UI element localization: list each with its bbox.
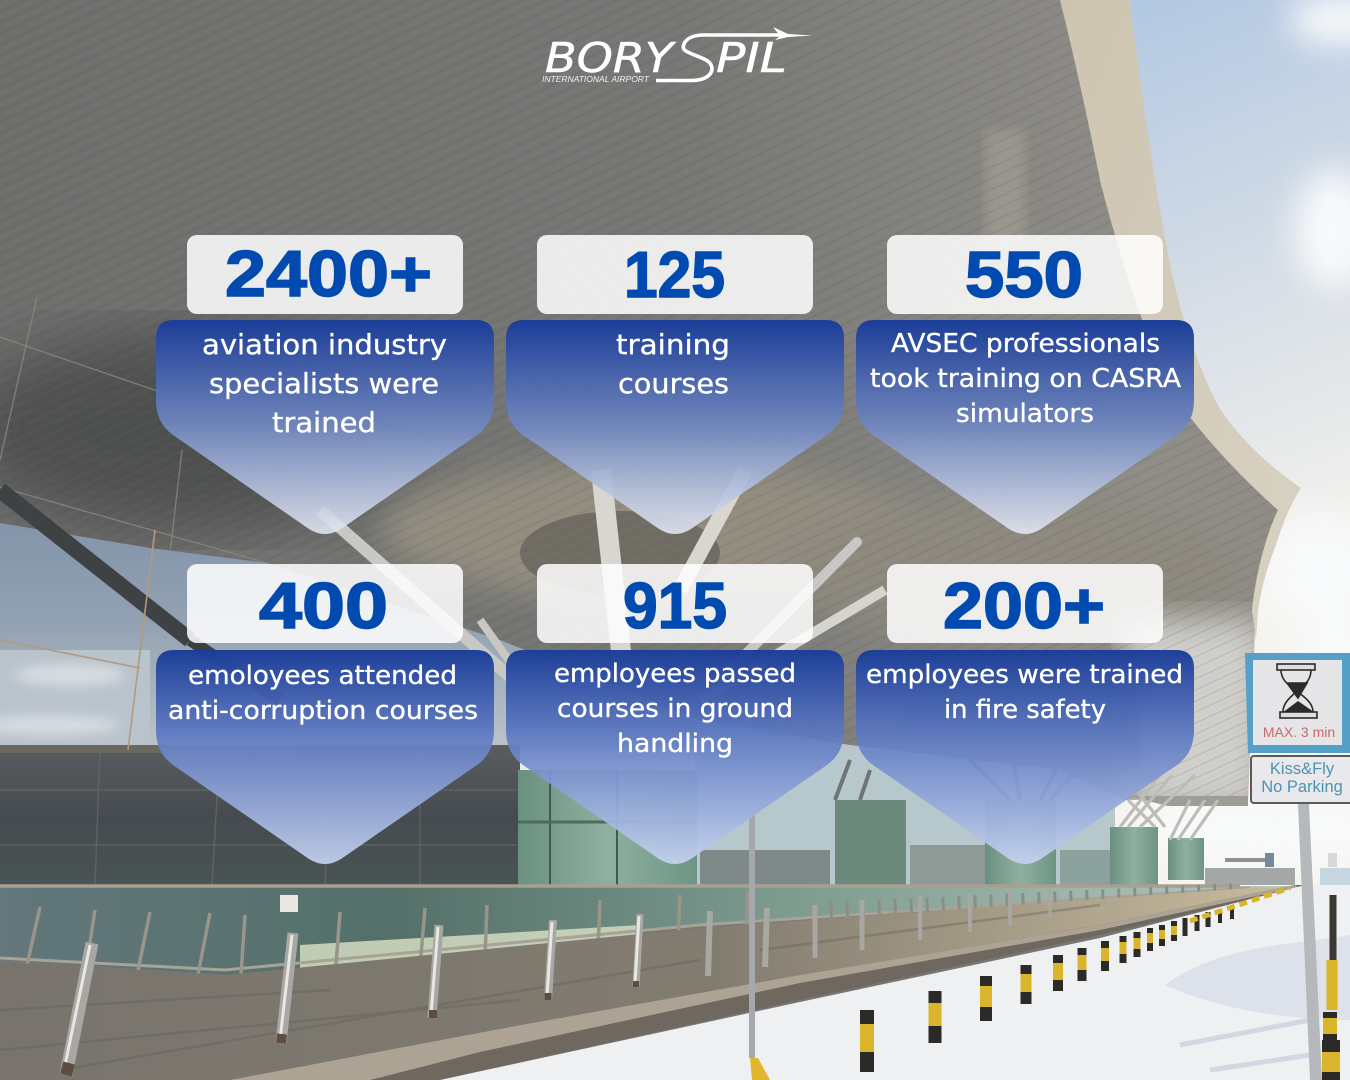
icon: hourglass	[1277, 664, 1317, 718]
sidewalk	[0, 888, 1295, 1080]
stat card: 400	[156, 564, 494, 864]
glass columns	[518, 770, 1204, 887]
description	[870, 329, 1181, 429]
distant buildings at horizon	[1205, 853, 1350, 885]
description: emoloyees attended	[188, 661, 457, 691]
description: employees passed	[554, 659, 796, 689]
stat card: 125	[506, 235, 844, 534]
description: courses in ground	[557, 694, 793, 724]
description: handling	[617, 729, 733, 759]
description	[616, 328, 730, 400]
number: 400	[259, 569, 388, 642]
logo wordmark BORY: BORY	[545, 34, 676, 82]
description	[554, 659, 796, 759]
sign: kiss and fly: Kiss&Fly	[1270, 760, 1335, 778]
roof soffit	[0, 0, 1350, 810]
description: took training on CASRA	[870, 364, 1181, 394]
number: 2400+	[225, 237, 432, 310]
pentagon panel	[156, 650, 494, 864]
logo wordmark PIL: PIL	[716, 34, 787, 82]
walkway sign pole	[750, 810, 770, 1080]
yellow and black road bollards	[867, 888, 1333, 1080]
sign: kiss and fly	[1251, 756, 1350, 803]
number box	[537, 564, 813, 643]
snow field	[440, 885, 1350, 1080]
logo subtitle: INTERNATIONAL AIRPORT	[542, 75, 650, 84]
number: 200+	[943, 569, 1105, 642]
description	[202, 328, 447, 439]
description: training	[616, 328, 730, 361]
reflected sky in terminal glass	[0, 500, 860, 750]
number: 125	[624, 238, 725, 311]
roof wing bottom edge	[1128, 796, 1248, 806]
number box	[537, 235, 813, 314]
description: courses	[618, 367, 729, 400]
stat card: 2400+	[156, 235, 494, 534]
number box	[187, 235, 463, 314]
number box	[887, 564, 1163, 643]
number box	[187, 564, 463, 643]
facade lines and struts	[0, 470, 1218, 840]
lower glass balustrade	[0, 886, 1300, 990]
description: employees were trained	[866, 660, 1183, 690]
pentagon panel	[506, 320, 844, 534]
number: 915	[623, 569, 727, 642]
curb and gutter	[230, 885, 1310, 1080]
description: trained	[272, 406, 376, 439]
description	[866, 660, 1183, 725]
number box	[887, 235, 1163, 314]
pentagon panel	[856, 650, 1194, 864]
stat card: 550	[856, 235, 1194, 534]
pentagon panel	[506, 650, 844, 864]
description: AVSEC professionals	[891, 329, 1160, 359]
description: specialists were	[209, 367, 439, 400]
pentagon panel	[156, 320, 494, 534]
parking sign: max 3 min	[1245, 653, 1350, 753]
description: aviation industry	[202, 328, 447, 361]
description: anti-corruption courses	[168, 696, 478, 726]
sign text: max 3 min: MAX. 3 min	[1263, 724, 1335, 740]
description: simulators	[956, 399, 1094, 429]
logo: Boryspil International Airport	[542, 27, 812, 84]
number: 550	[965, 238, 1083, 311]
logo swoosh S and plane	[656, 27, 812, 80]
stat card: 915	[506, 564, 844, 864]
stat card: 200+	[856, 564, 1194, 864]
description: in fire safety	[944, 695, 1106, 725]
roof fascia band	[1060, 0, 1301, 640]
description	[168, 661, 478, 726]
steel bollards	[64, 888, 1050, 1075]
dark ground-floor glazing	[0, 745, 1115, 887]
pentagon panel	[856, 320, 1194, 534]
sign: kiss and fly: No Parking	[1261, 778, 1343, 796]
sign pole	[1298, 804, 1322, 1080]
